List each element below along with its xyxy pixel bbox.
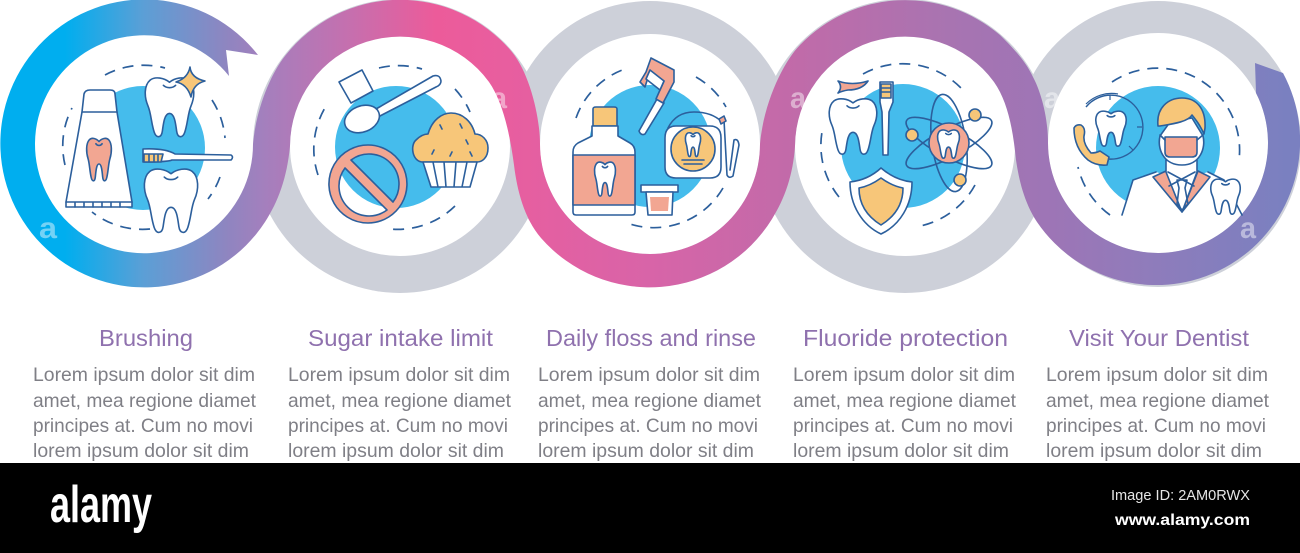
step 2 text: sugar intake limit: amet, mea regione diamet: [288, 390, 512, 412]
image id: Image ID: 2AM0RWX: [1111, 487, 1250, 504]
step 3 text: daily floss and rinse: Daily floss and rinse: [546, 325, 756, 351]
icon: fluoride protection: [821, 64, 998, 234]
step 5 text: visit your dentist: lorem ipsum dolor sit dim: [1046, 440, 1262, 462]
watermark letters: a: [1240, 212, 1256, 245]
step 3 text: daily floss and rinse: principes at. Cum no movi: [538, 415, 758, 437]
step 4 text: fluoride protection: [793, 325, 1017, 462]
icon: brushing: [63, 65, 233, 232]
step 2 text: sugar intake limit: principes at. Cum no movi: [288, 415, 508, 437]
white step discs: [35, 33, 1268, 256]
step 4 text: fluoride protection: amet, mea regione diamet: [793, 390, 1017, 412]
step 2 text: sugar intake limit: [288, 325, 512, 462]
watermark letters: a: [790, 82, 806, 115]
step 1 text: brushing: [33, 325, 257, 462]
watermark letters: a: [491, 82, 507, 115]
step 2 text: sugar intake limit: Sugar intake limit: [308, 325, 493, 351]
step 3 text: daily floss and rinse: [538, 325, 762, 462]
step 1 text: brushing: Brushing: [99, 325, 193, 351]
step 1 text: brushing: Lorem ipsum dolor sit dim: [33, 364, 255, 386]
black footer bar: [0, 463, 1300, 553]
watermark letters: a: [1044, 82, 1060, 115]
step 2 text: sugar intake limit: Lorem ipsum dolor sit dim: [288, 364, 510, 386]
watermark letters: [39, 82, 1256, 245]
step 5 text: visit your dentist: Lorem ipsum dolor sit dim: [1046, 364, 1268, 386]
step 4 text: fluoride protection: lorem ipsum dolor sit dim: [793, 440, 1009, 462]
step 5 text: visit your dentist: amet, mea regione diamet: [1046, 390, 1270, 412]
step 5 text: visit your dentist: [1046, 325, 1270, 462]
step 4 text: fluoride protection: principes at. Cum no movi: [793, 415, 1013, 437]
step 5 text: visit your dentist: principes at. Cum no movi: [1046, 415, 1266, 437]
step 4 text: fluoride protection: Lorem ipsum dolor sit dim: [793, 364, 1015, 386]
step 1 text: brushing: lorem ipsum dolor sit dim: [33, 440, 249, 462]
icon: visit your dentist: [1074, 68, 1242, 215]
step 3 text: daily floss and rinse: lorem ipsum dolor sit dim: [538, 440, 754, 462]
icon: daily floss and rinse: [573, 58, 739, 228]
icon: sugar intake limit: [314, 66, 488, 229]
step 4 text: fluoride protection: Fluoride protection: [803, 325, 1008, 351]
step 3 text: daily floss and rinse: Lorem ipsum dolor sit dim: [538, 364, 760, 386]
step 5 text: visit your dentist: Visit Your Dentist: [1069, 325, 1249, 351]
gradient wave ribbon with arrow ends: [0, 0, 1300, 287]
step 1 text: brushing: amet, mea regione diamet: [33, 390, 257, 412]
step 1 text: brushing: principes at. Cum no movi: [33, 415, 253, 437]
website: www.alamy.com: [1114, 512, 1250, 529]
grey ribbon segments: [253, 0, 1300, 293]
step 2 text: sugar intake limit: lorem ipsum dolor sit dim: [288, 440, 504, 462]
step 3 text: daily floss and rinse: amet, mea regione diamet: [538, 390, 762, 412]
logo: alamy: alamy: [50, 476, 152, 534]
watermark letters: a: [39, 212, 57, 245]
